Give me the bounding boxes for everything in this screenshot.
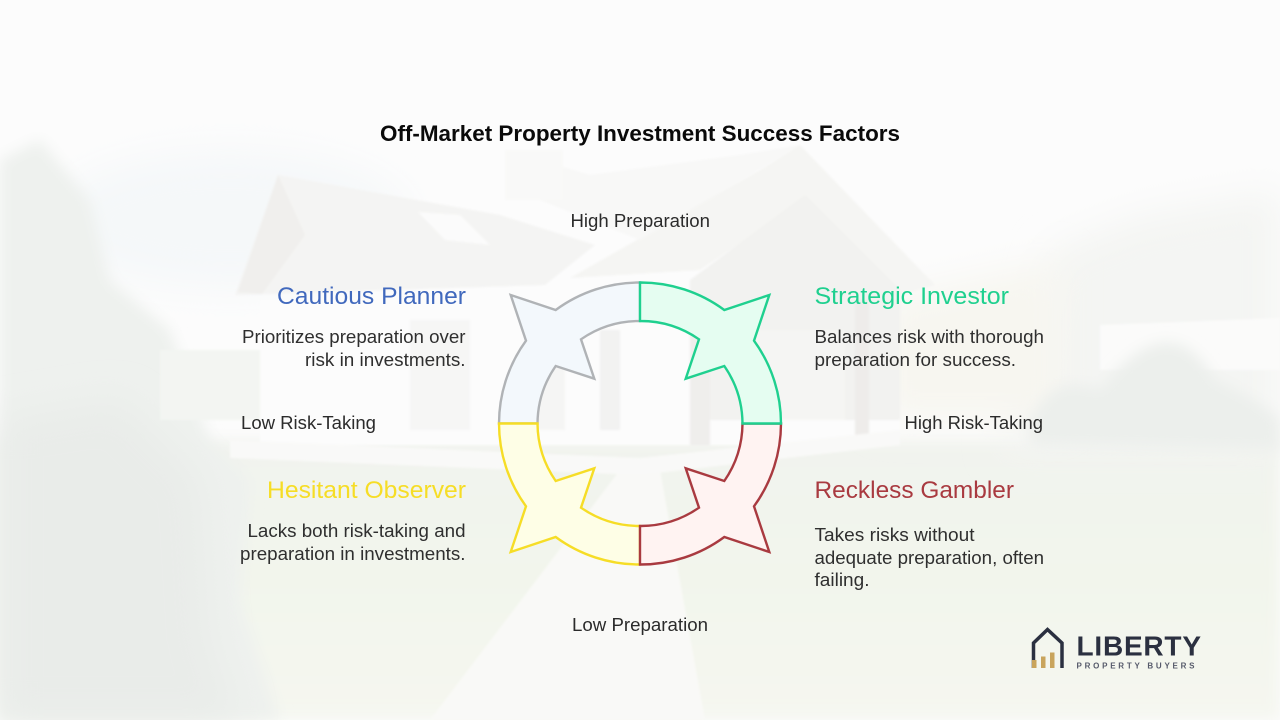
description: hesitant observer: Lacks both risk-taking and bbox=[248, 521, 466, 541]
heading: hesitant observer: Hesitant Observer bbox=[267, 477, 466, 504]
description: reckless gambler bbox=[814, 525, 1044, 590]
description: strategic investor: Balances risk with thorough bbox=[814, 327, 1044, 347]
logo tagline: PROPERTY BUYERS bbox=[1076, 662, 1195, 670]
axis label: high preparation: High Preparation bbox=[570, 211, 710, 231]
cycle diagram: four curved arrows bbox=[499, 282, 781, 565]
description: reckless gambler: failing. bbox=[814, 570, 870, 590]
description: reckless gambler: adequate preparation, often bbox=[814, 548, 1044, 568]
description: cautious planner: Prioritizes preparation over bbox=[242, 327, 466, 347]
axis label: high risk-taking: High Risk-Taking bbox=[904, 413, 1043, 433]
arrow: cautious planner quadrant bbox=[499, 282, 640, 424]
description: strategic investor: preparation for success. bbox=[814, 350, 1016, 370]
panel: cautious planner bbox=[242, 283, 466, 370]
logo wordmark: LIBERTY bbox=[1076, 630, 1201, 662]
heading: reckless gambler: Reckless Gambler bbox=[814, 477, 1014, 504]
heading: strategic investor: Strategic Investor bbox=[814, 283, 1009, 310]
axis label: low preparation: Low Preparation bbox=[572, 615, 708, 635]
description: reckless gambler: Takes risks without bbox=[814, 525, 974, 545]
logo: liberty property buyers bbox=[1032, 630, 1201, 670]
description: hesitant observer: preparation in investments. bbox=[240, 544, 466, 564]
panel: strategic investor bbox=[814, 283, 1044, 370]
description: cautious planner: risk in investments. bbox=[305, 350, 466, 370]
panel: reckless gambler bbox=[814, 477, 1044, 590]
description: hesitant observer bbox=[240, 521, 466, 564]
arrow: hesitant observer quadrant bbox=[499, 424, 640, 565]
icon: house with bars bbox=[1032, 630, 1062, 668]
axis label: low risk-taking: Low Risk-Taking bbox=[241, 413, 376, 433]
arrow: reckless gambler quadrant bbox=[640, 424, 781, 565]
description: strategic investor bbox=[814, 327, 1044, 370]
heading: cautious planner: Cautious Planner bbox=[277, 283, 466, 310]
panel: hesitant observer bbox=[240, 477, 466, 564]
title: Off-Market Property Investment Success Factors bbox=[380, 121, 900, 146]
arrow: strategic investor quadrant bbox=[640, 282, 781, 424]
description: cautious planner bbox=[242, 327, 466, 370]
